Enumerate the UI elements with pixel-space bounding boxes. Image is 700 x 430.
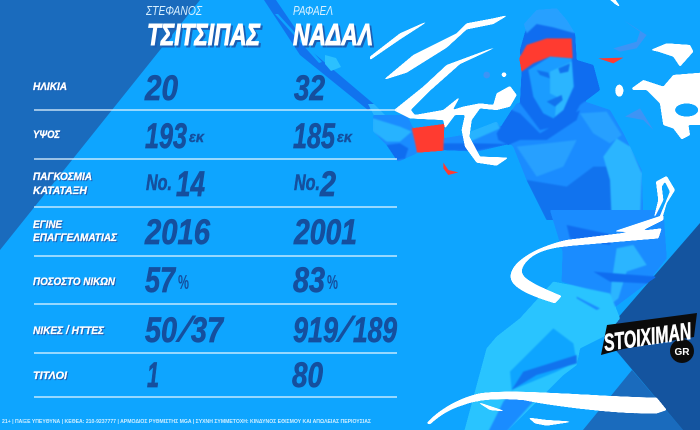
stats: Nadal column: 2 — [319, 165, 336, 204]
player: arm and hand — [373, 115, 512, 162]
illustration: lower body — [463, 210, 667, 430]
stats: Tsitsipas column: 1 — [147, 356, 159, 395]
stats: Nadal column: 919 — [293, 311, 338, 350]
stats: Tsitsipas column: 50 — [145, 311, 177, 350]
stats: Tsitsipas column: 20 — [144, 69, 178, 108]
stats: Nadal column: 80 — [292, 356, 323, 395]
illustration: violet paint accents — [483, 20, 653, 130]
heading: Nadal: ΝΑΔΑΛ — [293, 17, 373, 52]
row labels: ΚΑΤΑΤΑΞΗ — [33, 185, 88, 197]
row labels: ΕΠΑΓΓΕΛΜΑΤΙΑΣ — [33, 232, 117, 244]
stats: Tsitsipas column: 14 — [176, 165, 205, 204]
row labels — [33, 81, 117, 382]
stats: Tsitsipas column — [144, 69, 224, 395]
background: corner triangles bottom right — [583, 223, 700, 430]
illustration: red paint accents — [443, 58, 623, 175]
player: shorts and leg — [463, 282, 620, 430]
stats: Nadal column: 185 — [293, 117, 335, 156]
stats: Nadal column: εκ — [337, 129, 353, 146]
stats: Nadal column: / — [334, 309, 358, 350]
stats: Tsitsipas column: 57 — [145, 261, 176, 300]
player: headband — [519, 38, 573, 72]
illustration: tennis racket — [264, 0, 400, 150]
heading: Tsitsipas: ΣΤΕΦΑΝΟΣ — [145, 3, 203, 18]
heading: Nadal: ΡΑΦΑΕΛ — [293, 3, 333, 18]
row labels: ΗΛΙΚΙΑ — [33, 81, 67, 93]
stats: Nadal column: 189 — [353, 311, 397, 350]
stats: Tsitsipas column: 37 — [191, 311, 224, 350]
player: wristband — [412, 124, 444, 153]
stats: Nadal column: 2001 — [293, 213, 357, 252]
heading: Nadal — [293, 3, 373, 52]
player: torso lower — [550, 210, 667, 308]
row labels: ΤΙΤΛΟΙ — [33, 370, 68, 382]
row labels: ΝΙΚΕΣ / ΗΤΤΕΣ — [33, 325, 104, 337]
row labels: ΥΨΟΣ — [33, 129, 60, 141]
stats: Tsitsipas column: εκ — [189, 129, 205, 146]
footer disclaimer: 21+ | ΠΑΙΞΕ ΥΠΕΥΘΥΝΑ | ΚΕΘΕΑ: 210-9237777 | ΑΡΜΟΔΙΟΣ ΡΥΘΜΙΣΤΗΣ ΜGA | ΣΥΧΝΗ ΣΥΜΜΕΤΟΧΗ: ΚΙΝΔΥΝΟΣ ΕΘΙΣΜΟΥ ΚΑΙ ΑΠΩΛΕΙΑΣ ΠΕΡΙΟΥΣΙΑΣ — [2, 419, 372, 425]
stats: Tsitsipas column: / — [174, 309, 198, 350]
player: hair — [520, 8, 600, 130]
stats: Nadal column: 83 — [293, 261, 325, 300]
illustration: white paint strokes — [370, 0, 700, 220]
illustration: tennis player — [373, 8, 643, 220]
row labels: ΠΟΣΟΣΤΟ ΝΙΚΩΝ — [33, 276, 116, 288]
row labels: ΕΓΙΝΕ — [33, 219, 62, 231]
stats: Tsitsipas column: % — [178, 272, 189, 294]
background: dark triangle top left — [0, 0, 200, 250]
player: shirt — [497, 100, 643, 220]
stats: Tsitsipas column: 2016 — [144, 213, 210, 252]
stats: Nadal column: 32 — [294, 69, 325, 108]
stats: Tsitsipas column: 193 — [145, 117, 187, 156]
stats: Nadal column: % — [327, 272, 338, 294]
row labels: ΠΑΓΚΟΣΜΙΑ — [33, 171, 92, 183]
logo: Stoiximan GR: GR — [674, 347, 690, 358]
stats: Nadal column: No. — [294, 170, 320, 195]
heading: Tsitsipas — [145, 3, 261, 52]
illustration: white ribbons — [427, 215, 667, 426]
player: face — [528, 57, 574, 118]
stats: Tsitsipas column: No. — [146, 170, 172, 195]
row divider lines — [34, 110, 397, 397]
heading: Tsitsipas: ΤΣΙΤΣΙΠΑΣ — [147, 17, 261, 52]
stats: Nadal column — [292, 69, 397, 395]
